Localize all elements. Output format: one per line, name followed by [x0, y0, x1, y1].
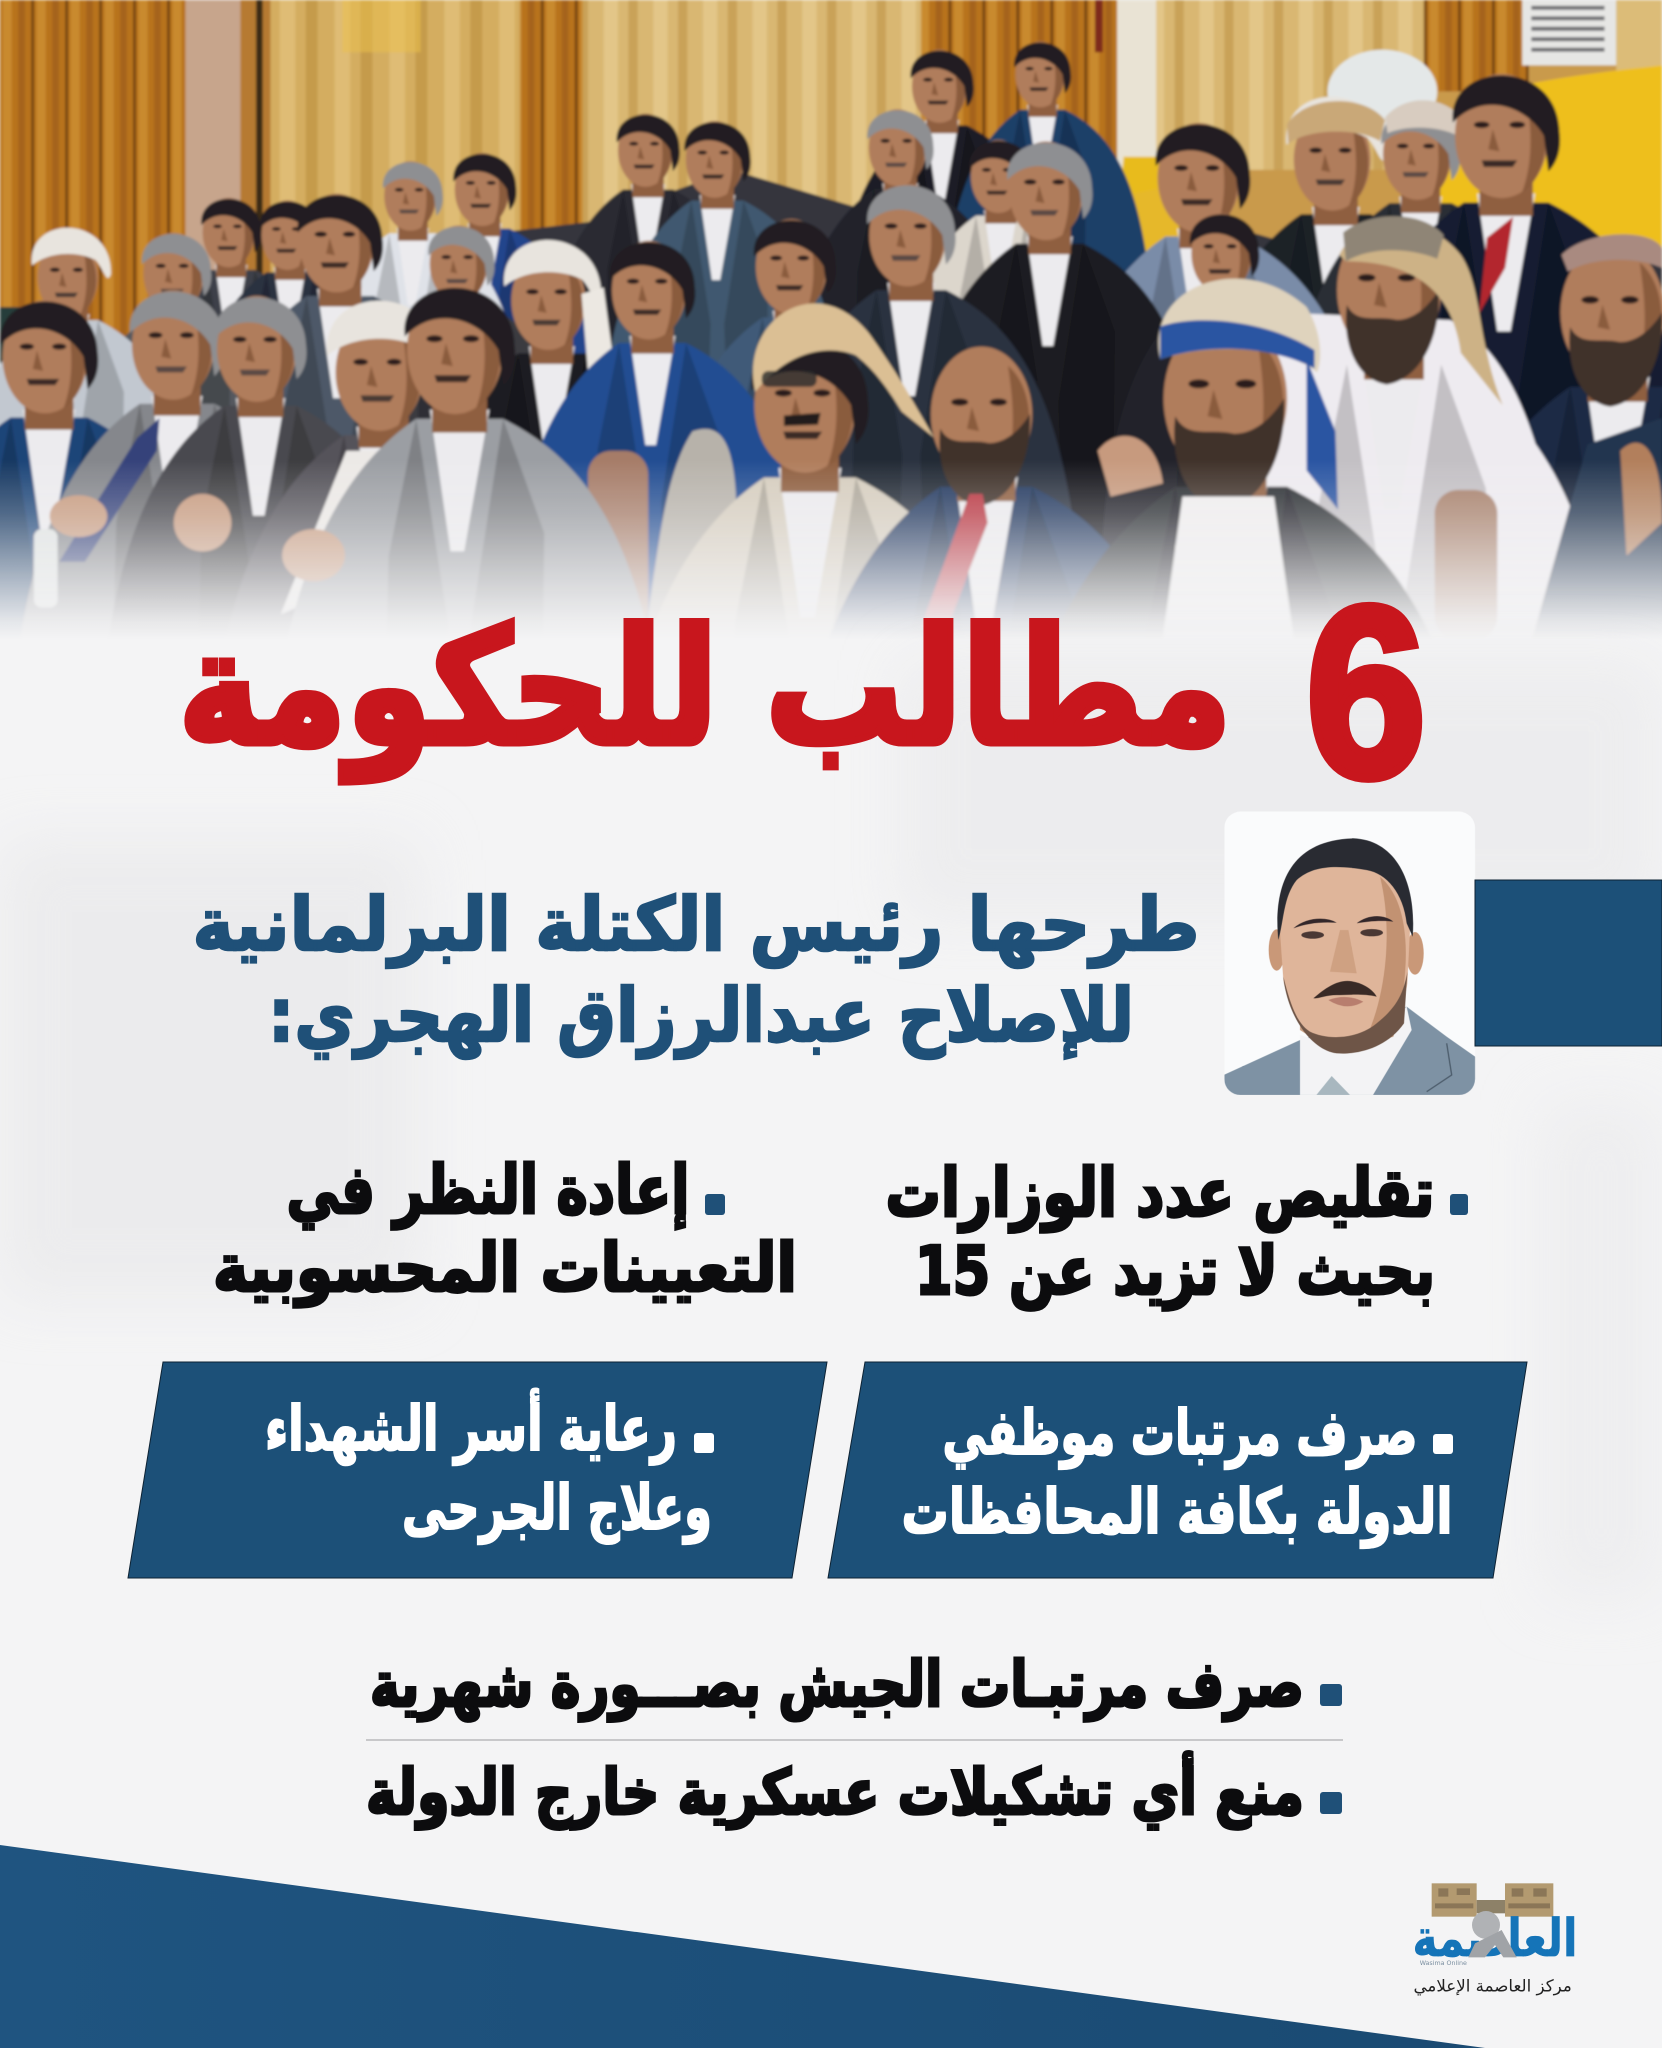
front row left men [0, 286, 677, 899]
demand: reduce ministries: تقليص عدد الوزارات [886, 1154, 1434, 1233]
logo: Al-Asima media center: Wasima Online [1420, 1960, 1467, 1967]
panel: martyrs families and wounded: رعاية أسر الشهداء [265, 1388, 677, 1465]
demand: review appointments: التعيينات المحسوبية [213, 1229, 797, 1308]
panel: martyrs families and wounded [128, 1362, 827, 1578]
front row centre and right men [648, 276, 1662, 630]
demand: ban military formations: منع أي تشكيلات عسكرية خارج الدولة [366, 1751, 1304, 1830]
photo: parliament members seated in rows [0, 0, 1662, 630]
demand: review appointments [213, 1151, 797, 1308]
logo: Al-Asima media center [1412, 1883, 1577, 1997]
panel: state employee salaries [828, 1362, 1527, 1578]
demand: army salaries monthly: صرف مرتبـات الجيش بصـــورة شهرية [370, 1648, 1304, 1722]
panel: state employee salaries: الدولة بكافة المحافظات [902, 1475, 1452, 1548]
panel: state employee salaries: صرف مرتبات موظفي [942, 1396, 1418, 1469]
title: مطالب للحكومة [178, 594, 1232, 782]
subtitle: line two: للإصلاح عبدالرزاق الهجري: [268, 973, 1134, 1060]
logo: Al-Asima media center: مركز العاصمة الإعلامي [1413, 1977, 1572, 1997]
panel: martyrs families and wounded: وعلاج الجرحى [402, 1471, 712, 1544]
title: 6 [1306, 557, 1426, 828]
demand: review appointments: إعادة النظر في [286, 1151, 690, 1230]
footer wedge [0, 1845, 1485, 2048]
demand: reduce ministries: بحيث لا تزيد عن 15 [915, 1232, 1435, 1311]
demand: reduce ministries [886, 1154, 1468, 1311]
back row: standing far men [198, 40, 1148, 364]
accent block beside portrait [1475, 880, 1662, 1046]
logo: Al-Asima media center: العاصمة [1412, 1909, 1577, 1969]
upper right rows [961, 72, 1662, 536]
middle row [0, 183, 1564, 602]
portrait: Abdulrazzaq Al-Hajri [1220, 812, 1480, 1100]
right front men with beards [1181, 216, 1662, 908]
title [178, 557, 1426, 828]
subtitle: line one: طرحها رئيس الكتلة البرلمانية [192, 882, 1200, 969]
